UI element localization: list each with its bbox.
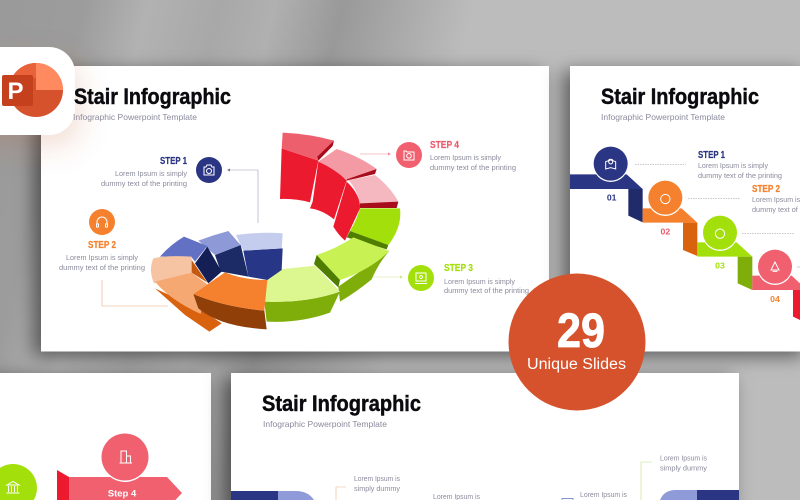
slide 3 green circle [0,464,37,500]
slide 1 subtitle: Infographic Powerpoint Template [73,113,197,122]
step 4 callout: dummy text of the printing [430,163,516,172]
panel: slide 3 card [0,373,211,500]
panel: slide 2 card [570,66,800,352]
slide 4 subtitle: Infographic Powerpoint Template [263,420,387,429]
slide 2 step 1 text [635,150,782,180]
stair 3: 03 [715,261,725,271]
slide 4 text D [641,454,707,500]
slide 4 text C [562,490,627,500]
slide 3 step 4 arrow [57,434,182,500]
badge: 29 unique slides: Unique Slides [527,356,626,373]
slide 4 text C: Lorem Ipsum is [580,490,627,499]
slide 2 step 1 text: Lorem Ipsum is simply [698,161,768,170]
step 3 callout: STEP 3 [444,263,473,274]
slide 4 title: Stair Infographic [262,391,421,416]
slide 1 title: Stair Infographic [74,84,231,109]
stair 2 [643,181,697,256]
slide 3 step 4 arrow: Step 4 [108,488,137,500]
panel: slide 4 card [231,373,739,500]
step 1 callout: Lorem Ipsum is simply [115,169,187,178]
step 1 callout: dummy text of the printing [101,179,187,188]
slide 4 text A: simply dummy [354,484,400,493]
slide 4 left stair [231,491,314,500]
panel: slide 1 card [41,66,549,352]
stair 1: 01 [607,192,617,202]
icon: PowerPoint app: P [7,78,24,105]
stair 1 [570,147,643,222]
stair 3 [697,216,752,290]
slide 2 step 1 text: STEP 1 [698,150,725,161]
slide 2 step 1 text: dummy text of the printing [698,171,782,180]
slide 4 text D: Lorem Ipsum is [660,454,707,462]
slide 4 text A [336,474,400,500]
step 1 callout: STEP 1 [160,156,187,167]
slide 2 connector lines [742,233,800,267]
slide 4 text D: simply dummy [660,464,707,472]
badge: 29 unique slides [508,274,646,410]
slide 2 step 2 text [688,184,800,214]
stair ring 3D chart [151,133,400,332]
stair 4: 04 [770,294,780,304]
slide 2 step 2 text: STEP 2 [752,184,780,195]
step 3 callout: dummy text of the printing [444,286,529,295]
badge: 29 unique slides: 29 [557,305,605,358]
slide 2 subtitle: Infographic Powerpoint Template [601,113,725,122]
staircase chart [570,147,800,320]
icon: PowerPoint app [0,47,75,135]
stair 2: 02 [661,226,670,236]
step 1 callout [101,156,258,223]
step 4 callout: Lorem Ipsum is simply [430,153,501,162]
step 2 callout: dummy text of the printing [59,263,145,272]
stair 4 [752,250,800,320]
slide 4 right stair [660,490,739,500]
orange segments [151,256,267,332]
step 2 callout: STEP 2 [88,240,116,251]
green segments [264,208,400,322]
slide 2 title: Stair Infographic [601,84,759,109]
step 4 callout [360,140,516,172]
step 3 callout: Lorem Ipsum is simply [444,277,515,286]
step 3 callout [373,263,529,295]
step 4 callout: STEP 4 [430,140,459,151]
slide 4 text A: Lorem Ipsum is [354,474,400,483]
blue segments [160,231,283,283]
step 2 callout: Lorem Ipsum is simply [66,253,138,262]
red segments [280,133,398,241]
step 2 callout [59,209,168,306]
